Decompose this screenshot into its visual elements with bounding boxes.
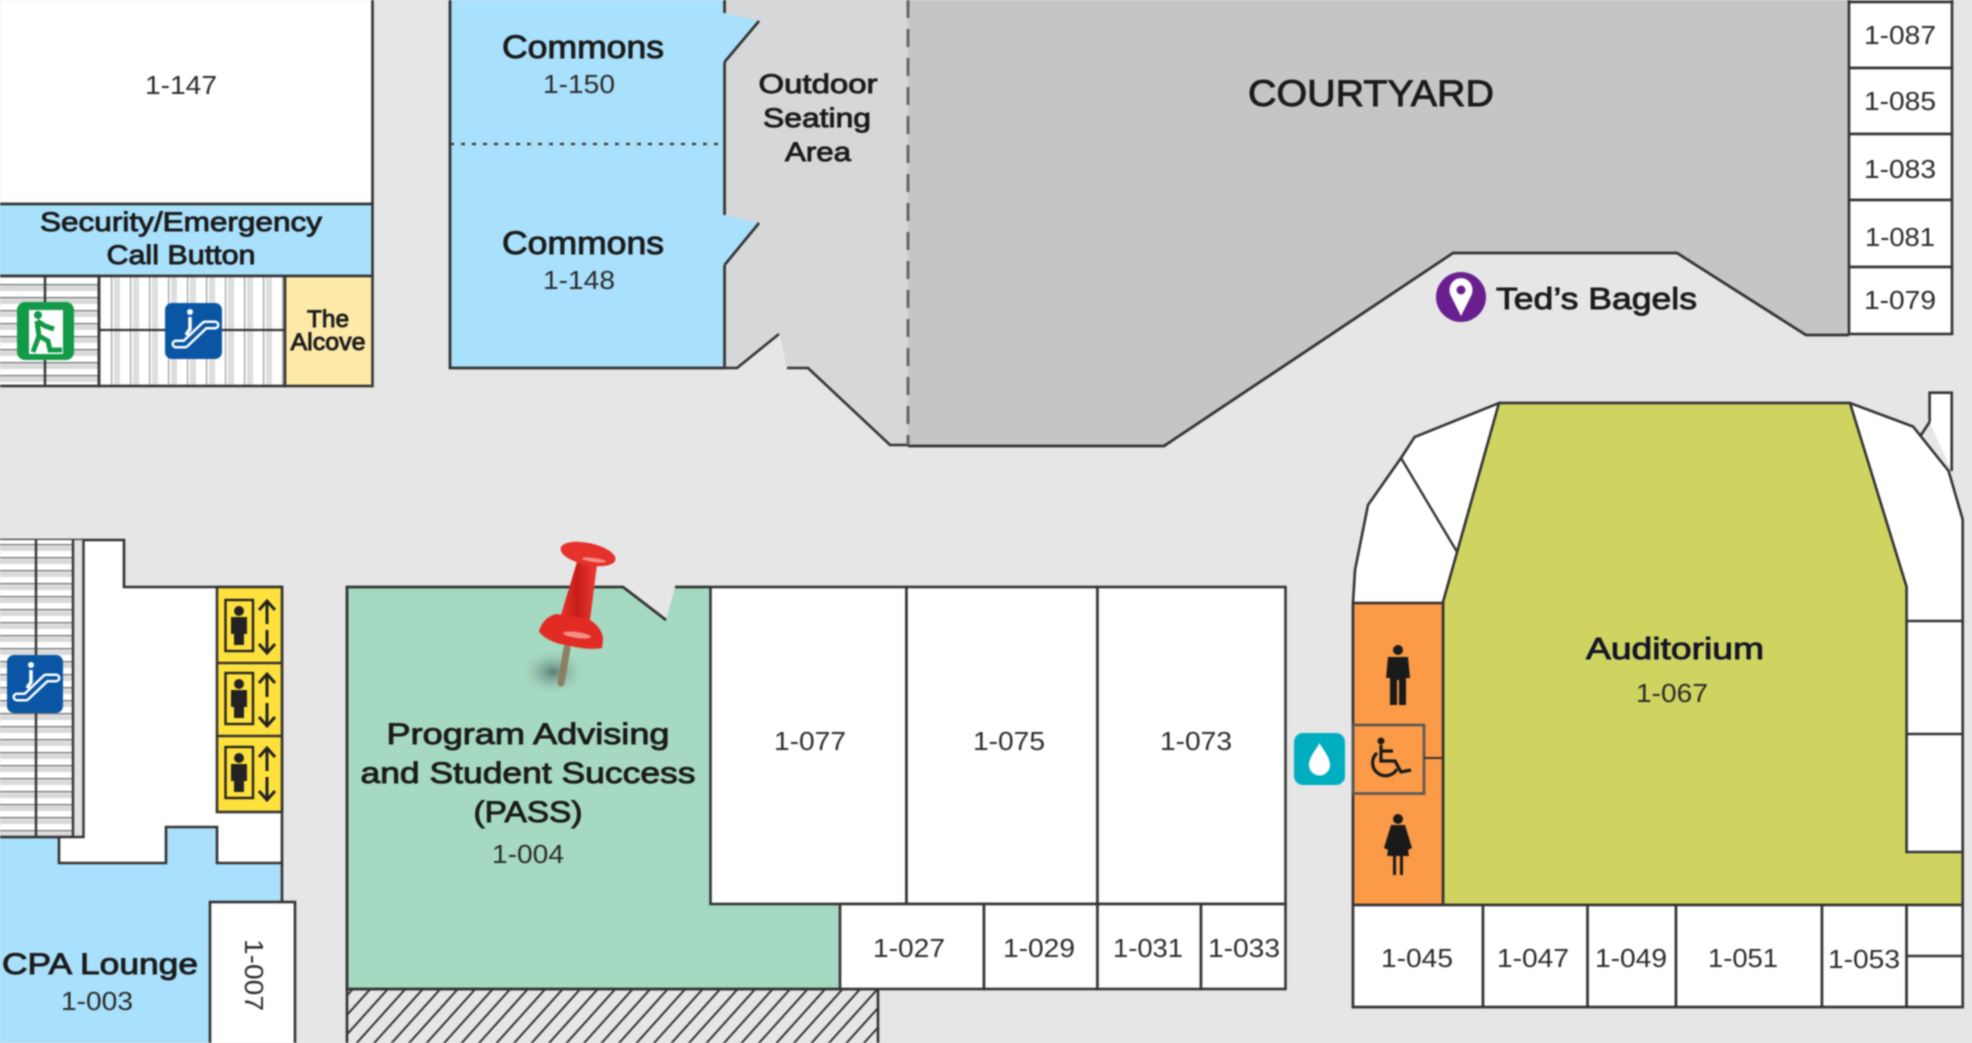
auditorium: Auditorium bbox=[1586, 631, 1764, 666]
rooms 1-027 to 1-033: 1-031 bbox=[1113, 933, 1183, 963]
the alcove bbox=[285, 276, 372, 386]
outdoor seating area: Area bbox=[785, 137, 852, 167]
commons 1-150 and 1-148: 1-148 bbox=[543, 265, 615, 295]
rooms 1-045 to 1-053: 1-049 bbox=[1595, 943, 1667, 973]
ted's bagels marker: Ted’s Bagels bbox=[1496, 281, 1697, 316]
program advising and student success room: Program Advising bbox=[386, 718, 670, 751]
auditorium building outline and side rooms bbox=[1353, 393, 1963, 1007]
rooms 1-077 1-075 1-073: 1-075 bbox=[973, 726, 1045, 756]
right column rooms 1-087 to 1-079 bbox=[1849, 0, 1952, 334]
program advising and student success room bbox=[347, 587, 840, 989]
right column rooms 1-087 to 1-079: 1-083 bbox=[1864, 154, 1936, 184]
icon: escalator upper bbox=[165, 303, 222, 359]
icon: wheelchair bbox=[1373, 738, 1411, 776]
rooms 1-045 to 1-053: 1-047 bbox=[1497, 943, 1569, 973]
commons 1-150 and 1-148 bbox=[450, 0, 759, 368]
courtyard bbox=[908, 0, 1849, 446]
cpa lounge: 1-003 bbox=[61, 986, 133, 1016]
outdoor seating area: Outdoor bbox=[758, 69, 878, 99]
rooms 1-027 to 1-033: 1-029 bbox=[1003, 933, 1075, 963]
the alcove: Alcove bbox=[290, 329, 366, 356]
rooms 1-077 1-075 1-073: 1-077 bbox=[774, 726, 846, 756]
security emergency call button: Security/Emergency bbox=[40, 207, 323, 237]
icon: women bbox=[1384, 814, 1412, 875]
program advising and student success room: (PASS) bbox=[474, 796, 582, 829]
auditorium: 1-067 bbox=[1636, 678, 1708, 708]
outdoor seating area: Seating bbox=[763, 103, 871, 133]
escalator stairs lower level bbox=[0, 540, 84, 837]
ted's bagels marker bbox=[1436, 272, 1697, 322]
rooms 1-045 to 1-053 bbox=[1353, 905, 1963, 1007]
program advising and student success room: and Student Success bbox=[360, 757, 696, 790]
cpa lounge bbox=[0, 827, 282, 1043]
right column rooms 1-087 to 1-079: 1-081 bbox=[1865, 222, 1935, 252]
rooms 1-027 to 1-033: 1-027 bbox=[873, 933, 945, 963]
exit stairs bbox=[0, 276, 99, 386]
icon: emergency exit bbox=[17, 302, 74, 360]
the alcove: The bbox=[307, 306, 349, 333]
right column rooms 1-087 to 1-079: 1-085 bbox=[1864, 86, 1936, 116]
rooms 1-045 to 1-053: 1-045 bbox=[1381, 943, 1453, 973]
outdoor seating area bbox=[724, 0, 908, 445]
room 1-147 bbox=[0, 0, 372, 204]
room 1-007: 1-007 bbox=[239, 939, 269, 1011]
hatched area bbox=[347, 989, 878, 1043]
icon: men bbox=[1386, 645, 1410, 705]
commons 1-150 and 1-148: 1-150 bbox=[543, 69, 615, 99]
commons 1-150 and 1-148: Commons bbox=[502, 29, 664, 65]
central white corridor bbox=[0, 540, 282, 863]
restrooms bbox=[1353, 603, 1443, 905]
security emergency call button: Call Button bbox=[106, 240, 256, 270]
rooms 1-027 to 1-033: 1-033 bbox=[1208, 933, 1280, 963]
push pin bbox=[519, 537, 618, 696]
rooms 1-027 to 1-033 bbox=[840, 904, 1286, 989]
courtyard: COURTYARD bbox=[1248, 73, 1494, 114]
rooms 1-077 1-075 1-073: 1-073 bbox=[1160, 726, 1232, 756]
auditorium bbox=[1443, 403, 1963, 905]
room 1-007 bbox=[210, 902, 295, 1043]
commons 1-150 and 1-148: Commons bbox=[502, 225, 664, 261]
program advising and student success room: 1-004 bbox=[492, 839, 564, 869]
elevators bbox=[217, 587, 282, 812]
icon: escalator lower bbox=[7, 655, 63, 713]
elevator 3 bbox=[226, 747, 275, 800]
right column rooms 1-087 to 1-079: 1-079 bbox=[1864, 285, 1936, 315]
rooms 1-045 to 1-053: 1-051 bbox=[1708, 943, 1778, 973]
rooms 1-077 1-075 1-073 bbox=[710, 587, 1286, 904]
cpa lounge: CPA Lounge bbox=[2, 948, 198, 981]
elevator 2 bbox=[226, 673, 275, 726]
room 1-147: 1-147 bbox=[145, 70, 217, 100]
icon: water fountain bbox=[1294, 733, 1345, 785]
rooms 1-045 to 1-053: 1-053 bbox=[1828, 944, 1900, 974]
security emergency call button bbox=[0, 204, 372, 276]
elevator 1 bbox=[226, 600, 275, 653]
escalator stairs upper level bbox=[99, 276, 285, 386]
right column rooms 1-087 to 1-079: 1-087 bbox=[1864, 20, 1936, 50]
